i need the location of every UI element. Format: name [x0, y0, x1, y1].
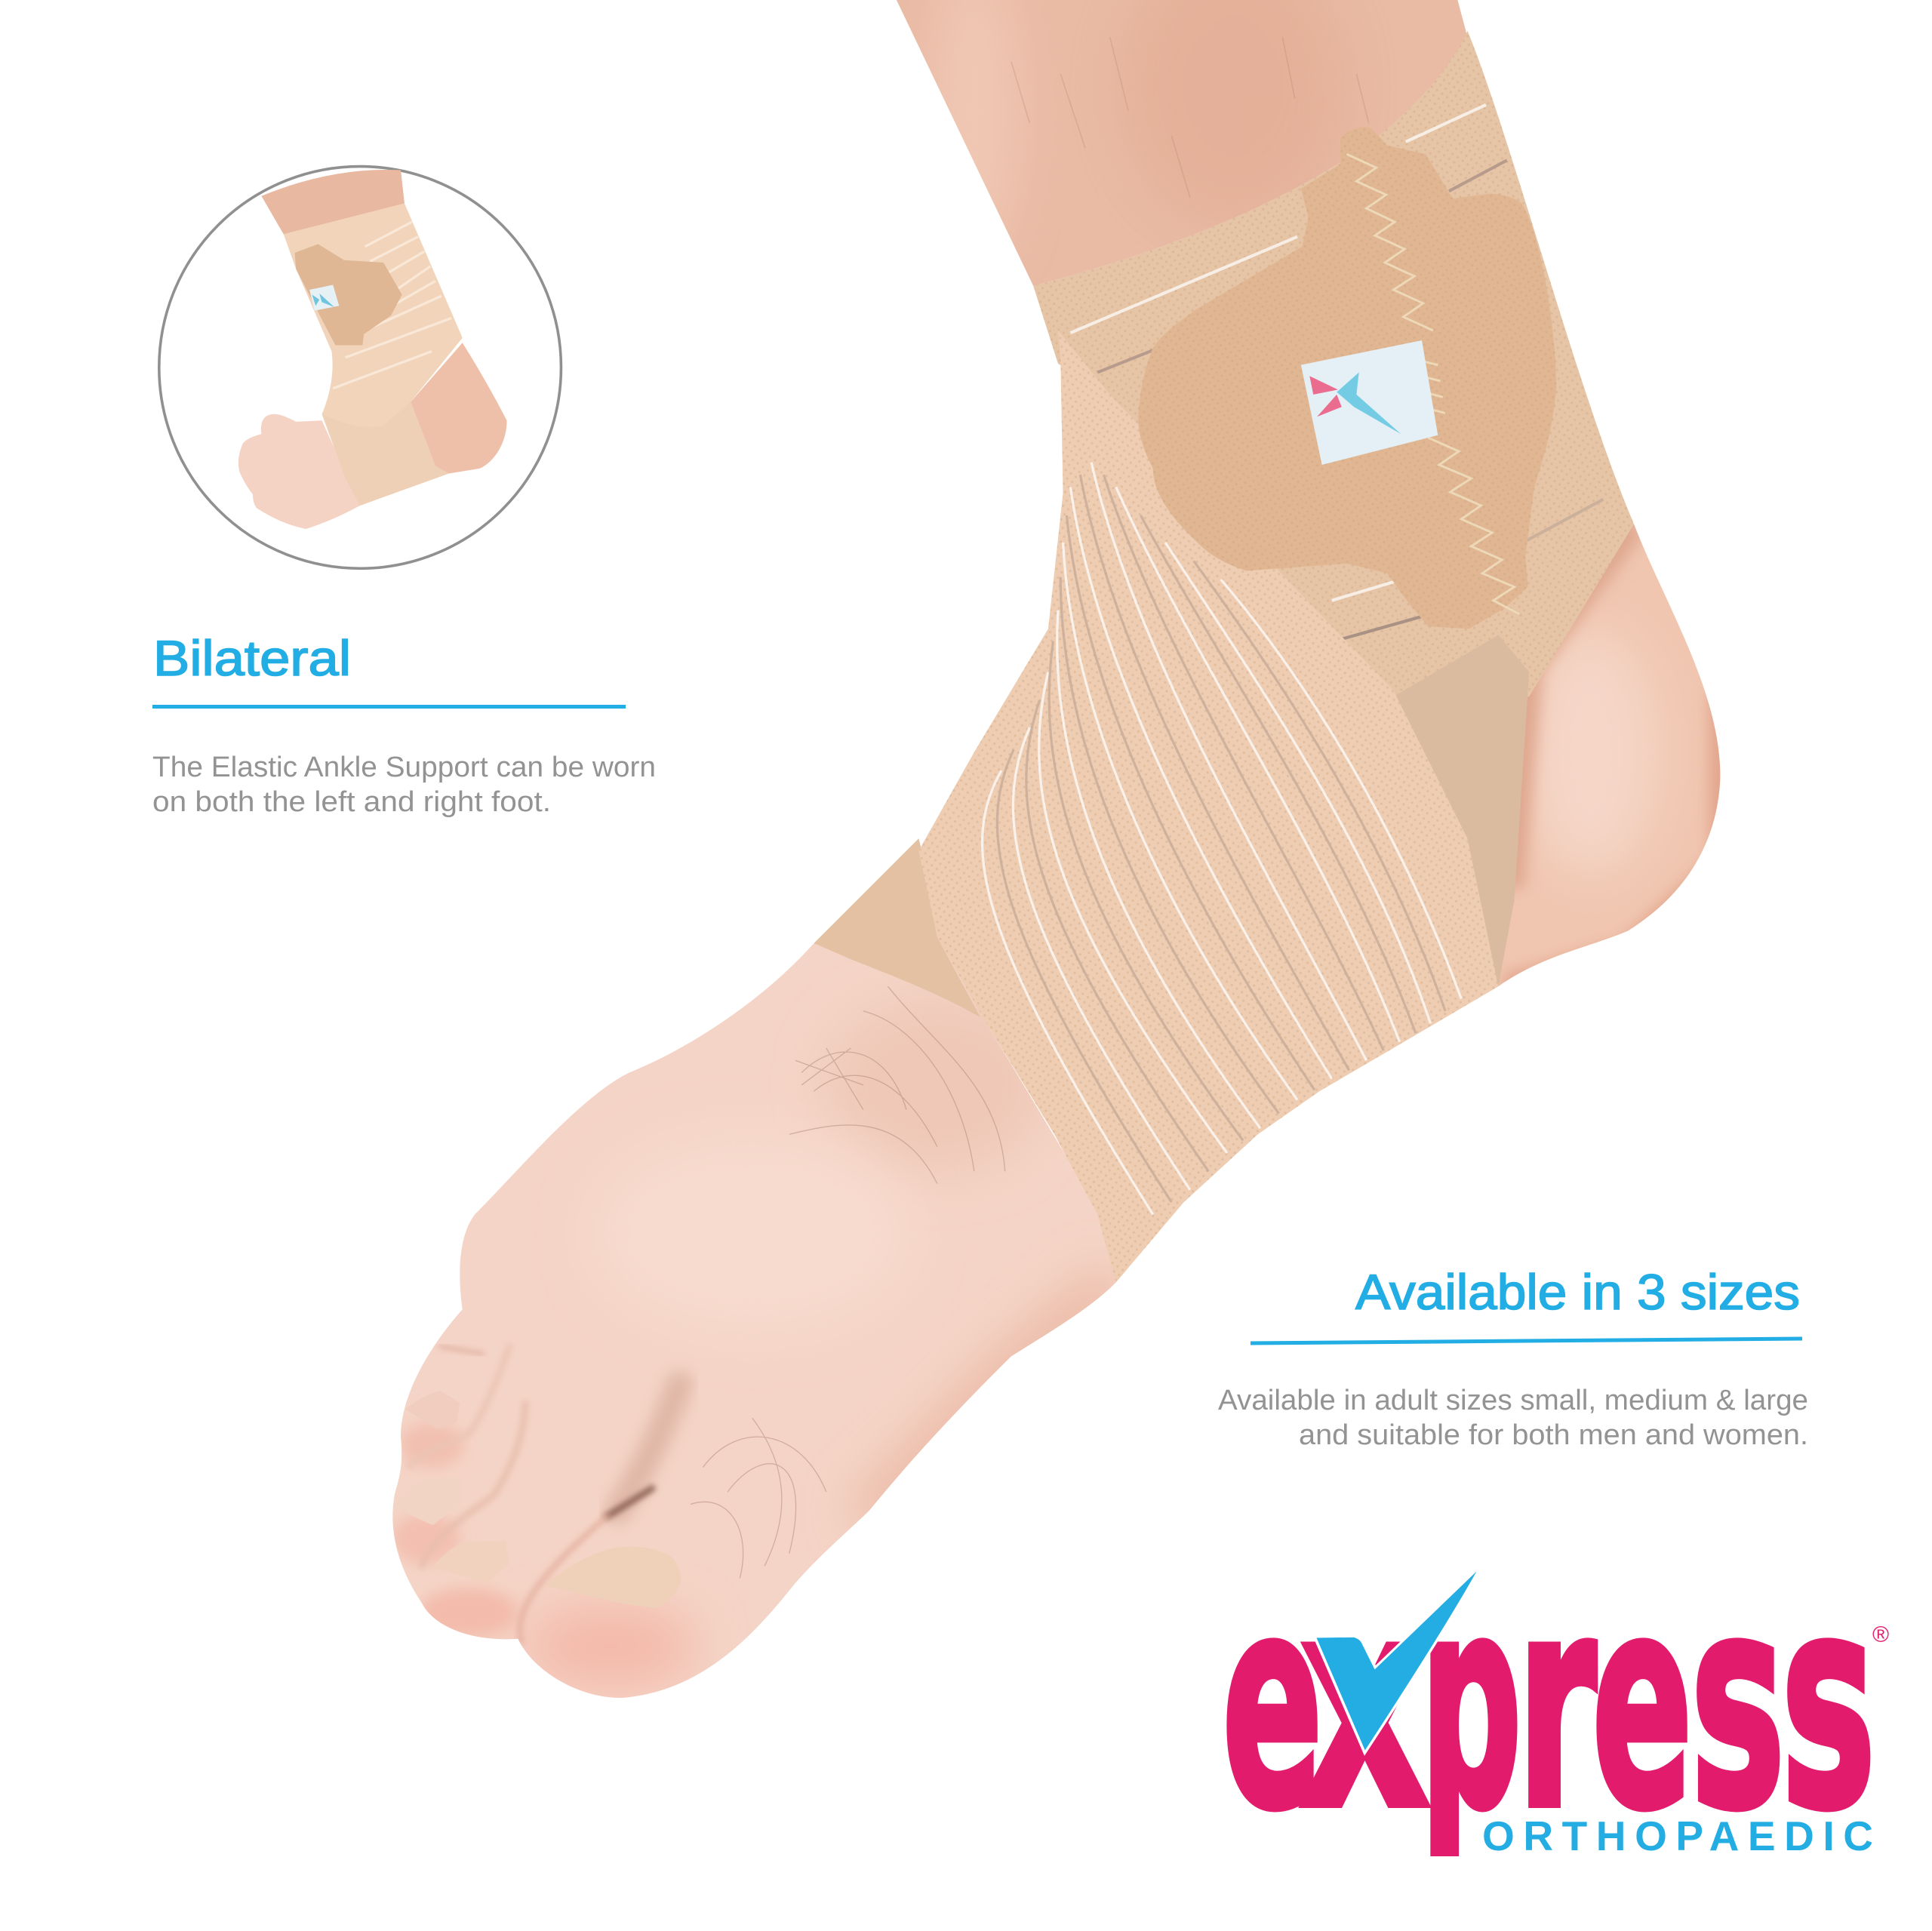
inset brace body: [284, 204, 463, 506]
inset brace bands: [333, 222, 451, 389]
text block: Bilateral description: The Elastic Ankle Support can be worn: [152, 752, 656, 783]
toenails: [392, 1428, 681, 1598]
inset circle: product from the other foot: [159, 167, 561, 568]
logo wordmark: x: [1300, 1536, 1429, 1874]
woven brand label: [1301, 340, 1438, 465]
rule under Available in 3 sizes: [1251, 1339, 1802, 1343]
logo wordmark: e: [1223, 1535, 1323, 1874]
text block: sizes description: and suitable for both men and women.: [1299, 1419, 1808, 1451]
logo wordmark: s: [1781, 1536, 1876, 1874]
left small strap: [814, 838, 980, 1017]
logo wordmark: r: [1517, 1536, 1598, 1874]
darker heel panel: [1393, 635, 1529, 986]
main diagonal wrap strap: [918, 331, 1498, 1282]
inset ankle mesh panel: [323, 402, 449, 506]
logo wordmark: [1226, 1637, 1870, 1856]
inset forefoot: [238, 414, 360, 529]
upper cuff of brace: [1033, 31, 1634, 703]
rule under Bilateral: [152, 705, 626, 709]
circle ring: [159, 167, 561, 568]
heading: Bilateral: Bilateral: [153, 630, 351, 686]
inset label mark: [312, 294, 334, 307]
strap white elastic lines: [983, 463, 1461, 1214]
logo tagline: ORTHOPAEDIC: [1482, 1813, 1873, 1859]
inset label: [309, 284, 339, 311]
inset leg skin: [261, 170, 405, 234]
velcro closure tab: [1138, 127, 1556, 629]
heading: Available in 3 sizes: Available in 3 sizes: [1355, 1264, 1800, 1320]
inset heel: [411, 343, 507, 473]
registered mark: ®: [1872, 1622, 1889, 1647]
strap grey elastic lines: [997, 475, 1445, 1202]
zig-zag stitching: [1346, 154, 1519, 614]
text block: sizes description: Available in adult sizes small, medium & large: [1218, 1385, 1808, 1416]
main photo: foot wearing elastic ankle support: [370, 0, 1727, 1714]
logo wordmark: e: [1592, 1535, 1693, 1874]
logo check mark: [1316, 1571, 1476, 1751]
inset velcro tab: [295, 244, 402, 346]
logo wordmark: s: [1690, 1536, 1786, 1874]
hair: [691, 986, 1005, 1579]
text block: Bilateral description: on both the left and right foot.: [152, 786, 551, 818]
brand logo: express orthopaedic: [1226, 1571, 1889, 1856]
logo wordmark: p: [1420, 1536, 1521, 1874]
toe gaps: [409, 1346, 679, 1642]
heel skin: [1497, 524, 1721, 986]
lower leg skin: [888, 0, 1480, 296]
forefoot and toes: [392, 936, 1116, 1698]
cuff elastic stripes: [1070, 105, 1603, 641]
